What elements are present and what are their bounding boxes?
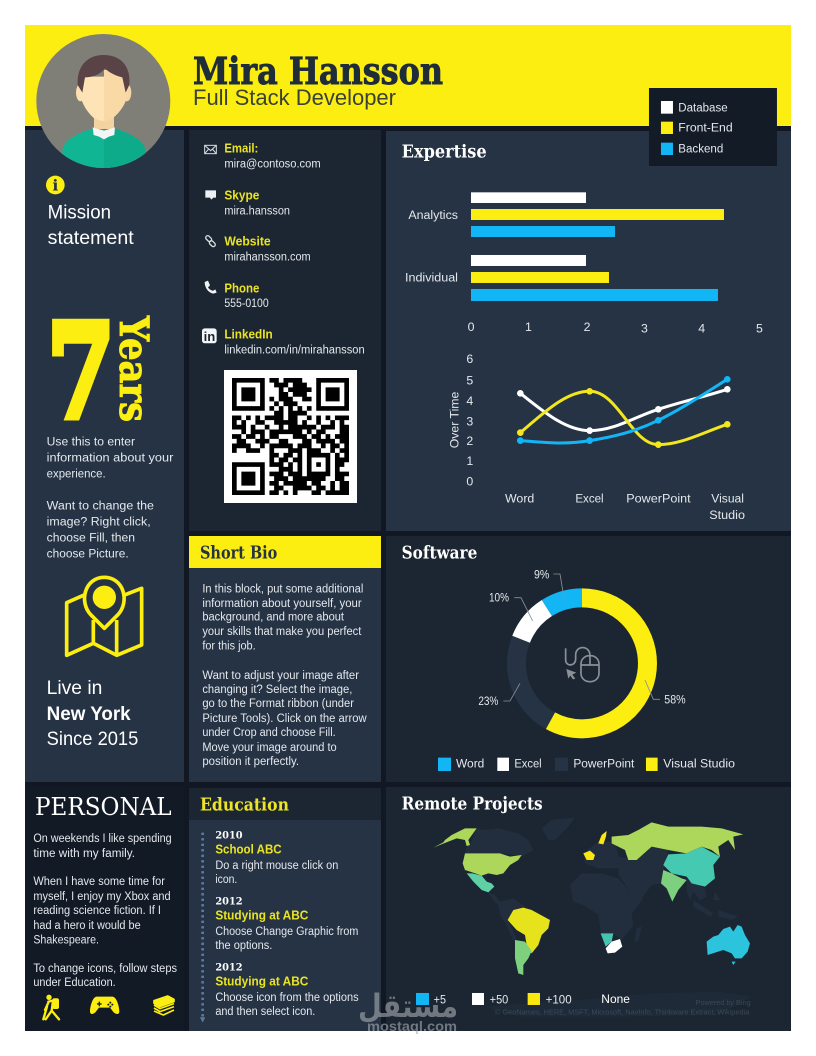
line chart: 0 bbox=[466, 475, 473, 489]
heading: personal: PERSONAL bbox=[35, 793, 172, 821]
personal text: time with my family. bbox=[33, 846, 135, 860]
experience text: experience. bbox=[47, 467, 106, 481]
heading: remote projects: Remote Projects bbox=[402, 794, 543, 814]
chart labels: 58% bbox=[664, 692, 686, 706]
contact details: mirahansson.com bbox=[224, 250, 311, 264]
bar chart: 5 bbox=[756, 322, 763, 336]
education entry 1: School ABC bbox=[215, 843, 282, 857]
line chart: Excel bbox=[575, 492, 604, 506]
personal text bbox=[33, 831, 177, 989]
line chart: Over Time bbox=[447, 391, 461, 448]
icon: email bbox=[205, 145, 216, 154]
line chart: 1 bbox=[466, 454, 473, 468]
location text: Live in bbox=[47, 678, 102, 699]
chart labels: 23% bbox=[478, 694, 498, 708]
chart labels bbox=[478, 567, 686, 708]
bio text: under Crop and choose Fill. bbox=[202, 725, 336, 739]
panel: short bio bbox=[189, 536, 381, 782]
line chart: 5 bbox=[466, 373, 473, 387]
panel: contact bbox=[189, 130, 381, 531]
panel: software bbox=[386, 536, 791, 782]
legend: software: Visual Studio bbox=[663, 757, 735, 771]
job title: Full Stack Developer bbox=[193, 85, 396, 110]
bio text: position it perfectly. bbox=[202, 754, 299, 768]
legend: projects: +100 bbox=[546, 992, 572, 1006]
contact details: Website bbox=[224, 234, 271, 248]
panel: expertise bbox=[386, 131, 791, 531]
personal text: myself, I enjoy my Xbox and bbox=[33, 889, 171, 903]
personal text: Shakespeare. bbox=[33, 932, 99, 946]
personal text: To change icons, follow steps bbox=[33, 961, 177, 975]
legend: projects: +5 bbox=[434, 992, 446, 1006]
mission statement bbox=[48, 202, 134, 249]
line chart: Word bbox=[505, 492, 534, 506]
name: Mira Hansson bbox=[193, 49, 443, 93]
donut chart bbox=[516, 598, 647, 729]
experience text bbox=[47, 435, 173, 561]
world map bbox=[433, 817, 752, 1017]
icon: gamepad bbox=[90, 997, 119, 1014]
panel: personal bbox=[25, 787, 184, 1031]
experience text: Use this to enter bbox=[47, 435, 135, 449]
bar chart: 3 bbox=[641, 322, 648, 336]
map credits bbox=[495, 998, 751, 1016]
contact details: 555-0100 bbox=[224, 296, 269, 310]
contact details: linkedin.com/in/mirahansson bbox=[224, 343, 365, 357]
line chart: Studio bbox=[709, 508, 745, 522]
line chart: 2 bbox=[466, 434, 473, 448]
contact details: mira@contoso.com bbox=[224, 157, 321, 171]
bio text: Move your image around to bbox=[202, 740, 337, 754]
education entry 2: 2012 bbox=[215, 894, 243, 907]
bar chart: 0 bbox=[468, 320, 475, 334]
watermark: مستقل bbox=[358, 987, 458, 1025]
personal text: under Education. bbox=[33, 975, 116, 989]
years of experience: 7 bbox=[47, 295, 115, 448]
icon: mouse bbox=[566, 648, 599, 682]
education entry 2 bbox=[215, 894, 358, 952]
education entry 3: and then select icon. bbox=[215, 1004, 315, 1018]
panel: remote projects bbox=[386, 787, 791, 1031]
QR code bbox=[224, 370, 357, 503]
legend: software: Excel bbox=[514, 757, 542, 771]
education entry 2: Studying at ABC bbox=[215, 909, 308, 923]
contact details: Email: bbox=[224, 142, 258, 156]
bar chart: Analytics bbox=[408, 208, 458, 222]
bar chart: 2 bbox=[584, 320, 591, 334]
experience text: information about your bbox=[47, 451, 173, 465]
watermark: mostaql.com bbox=[367, 1018, 457, 1034]
line chart: 3 bbox=[466, 415, 473, 429]
bio text: your skills that make you perfect bbox=[202, 624, 362, 638]
legend: skills: Front-End bbox=[678, 121, 733, 135]
line chart bbox=[447, 352, 745, 522]
legend: skills: Backend bbox=[678, 142, 723, 156]
bar chart bbox=[405, 192, 763, 336]
bio text: Want to adjust your image after bbox=[202, 668, 359, 682]
education entry 2: the options. bbox=[215, 938, 272, 952]
contact details bbox=[202, 142, 365, 357]
icon: map pin bbox=[67, 577, 142, 655]
chart labels: 9% bbox=[534, 567, 549, 581]
icon: info bbox=[46, 176, 65, 195]
education entry 3 bbox=[215, 960, 359, 1018]
bio text: for this job. bbox=[202, 639, 256, 653]
legend: software bbox=[438, 757, 735, 771]
heading: expertise: Expertise bbox=[402, 142, 487, 163]
contact details: Phone bbox=[224, 281, 259, 295]
icon: speech bubble bbox=[205, 190, 216, 200]
icon: hiker bbox=[43, 995, 59, 1019]
bar chart: Individual bbox=[405, 271, 458, 285]
personal text: had a hero it would be bbox=[33, 918, 141, 932]
portrait bbox=[36, 34, 170, 173]
bio text: background, and more about bbox=[202, 610, 344, 624]
education entry 1 bbox=[215, 828, 338, 886]
chart labels: 10% bbox=[489, 591, 509, 605]
bio text: In this block, put some additional bbox=[202, 581, 363, 595]
heading: short bio: Short Bio bbox=[200, 543, 277, 563]
legend: projects bbox=[416, 992, 630, 1006]
line chart: PowerPoint bbox=[626, 492, 691, 506]
contact details: LinkedIn bbox=[224, 327, 273, 341]
legend: skills bbox=[649, 88, 777, 166]
location text: Since 2015 bbox=[47, 729, 138, 750]
education entry 3: Studying at ABC bbox=[215, 975, 308, 989]
bio text: information about yourself, your bbox=[202, 596, 362, 610]
panel: left column bbox=[25, 130, 184, 782]
education entry 3: Choose icon from the options bbox=[215, 990, 359, 1004]
icon: books bbox=[154, 996, 174, 1015]
personal text: When I have some time for bbox=[33, 874, 165, 888]
heading: education: Education bbox=[200, 796, 289, 816]
line chart: 4 bbox=[466, 394, 473, 408]
legend: projects: None bbox=[601, 992, 630, 1006]
line chart: 6 bbox=[466, 352, 473, 366]
map credits: Powered by Bing bbox=[696, 998, 751, 1007]
legend: software: PowerPoint bbox=[573, 757, 635, 771]
location text bbox=[47, 678, 138, 750]
experience text: choose Fill, then bbox=[47, 531, 135, 545]
icon: phone bbox=[205, 281, 217, 294]
bio text: Picture Tools). Click on the arrow bbox=[202, 711, 367, 725]
experience text: choose Picture. bbox=[47, 547, 129, 561]
legend: projects: +50 bbox=[490, 992, 508, 1006]
mission statement: statement bbox=[48, 228, 134, 249]
education entry 1: 2010 bbox=[215, 828, 243, 841]
education entry 2: Choose Change Graphic from bbox=[215, 924, 358, 938]
contact details: Skype bbox=[224, 188, 259, 202]
mission statement: Mission bbox=[48, 202, 111, 223]
map credits: © GeoNames, HERE, MSFT, Microsoft, NavInfo, Thinkware Extract, Wikipedia bbox=[495, 1007, 750, 1016]
heading: software: Software bbox=[402, 543, 477, 563]
panel: education bbox=[189, 788, 381, 1031]
icon: link bbox=[205, 235, 216, 247]
line chart: Visual bbox=[711, 492, 744, 506]
bio text: go to the Format ribbon (under bbox=[202, 696, 354, 710]
education entry 3: 2012 bbox=[215, 960, 243, 973]
personal text: reading science fiction. If I bbox=[33, 903, 161, 917]
education entry 1: Do a right mouse click on bbox=[215, 858, 338, 872]
bar chart: 1 bbox=[525, 320, 532, 334]
personal text: On weekends I like spending bbox=[33, 831, 172, 845]
contact details: mira.hansson bbox=[224, 204, 290, 218]
contact details: in bbox=[204, 330, 215, 344]
legend: software: Word bbox=[456, 757, 484, 771]
header band bbox=[25, 25, 791, 126]
bio text bbox=[202, 581, 367, 768]
timeline bbox=[200, 833, 205, 1023]
bar chart: 4 bbox=[698, 322, 705, 336]
legend: skills: Database bbox=[678, 101, 728, 115]
experience text: image? Right click, bbox=[47, 515, 151, 529]
experience text: Want to change the bbox=[47, 499, 154, 513]
years of experience: Years bbox=[110, 315, 157, 422]
location text: New York bbox=[47, 704, 131, 725]
icon: linkedin bbox=[202, 328, 217, 343]
education entry 1: icon. bbox=[215, 872, 237, 886]
bio text: changing it? Select the image, bbox=[202, 682, 352, 696]
icon: info: i bbox=[52, 178, 59, 195]
